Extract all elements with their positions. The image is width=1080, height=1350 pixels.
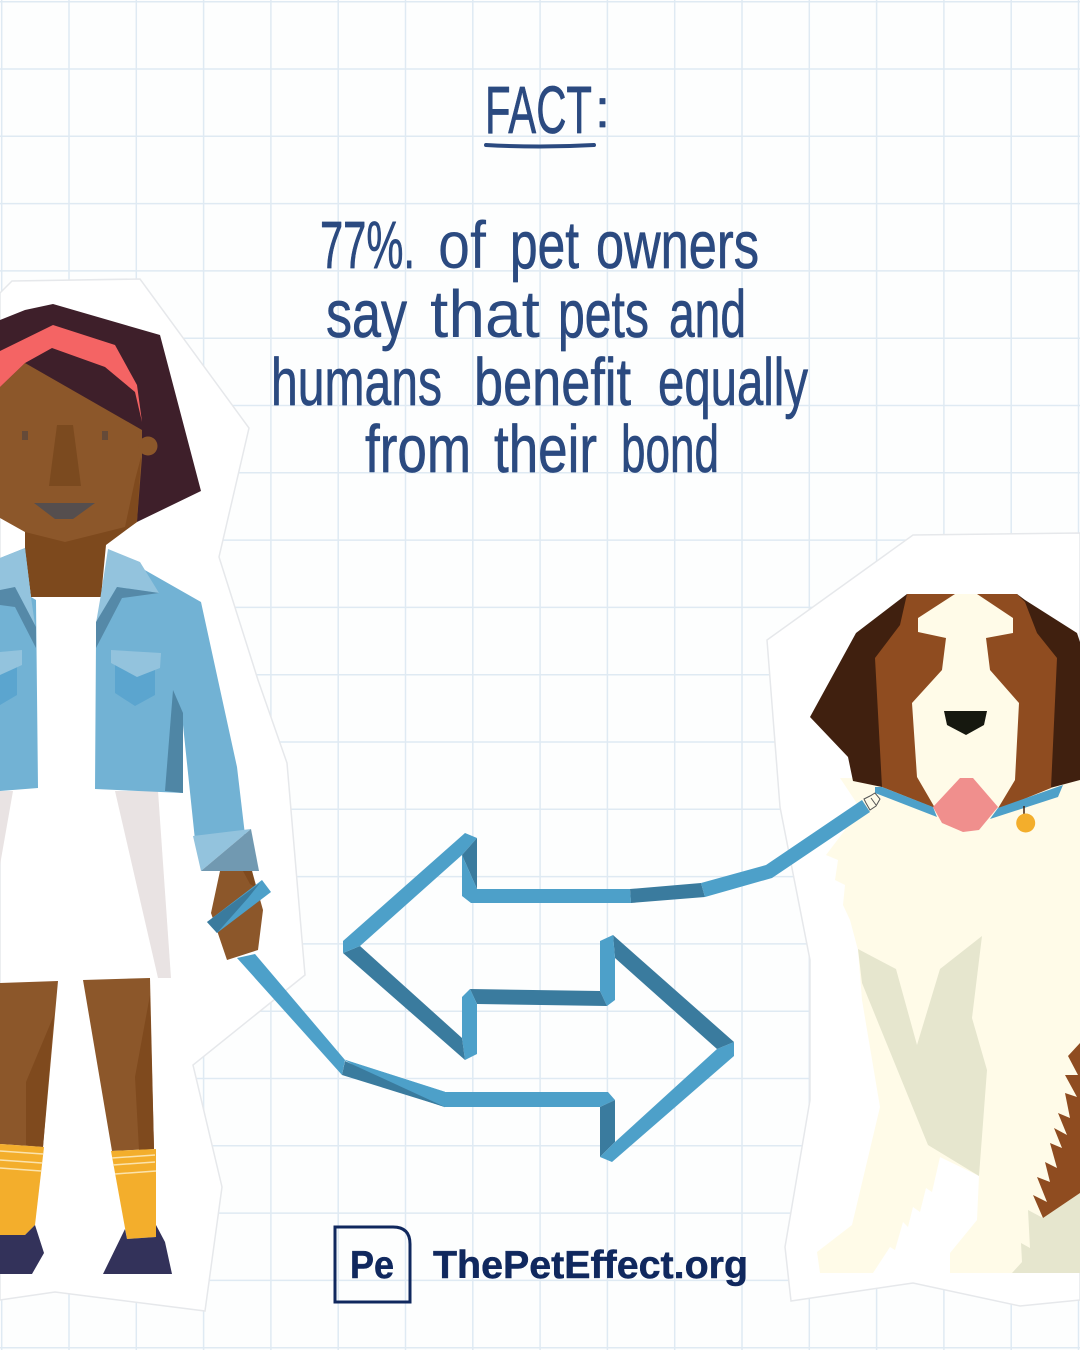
text block: 77% statistic: say — [326, 277, 407, 352]
face — [0, 363, 158, 542]
text block: 77% statistic: pet — [510, 208, 579, 283]
wristband — [207, 880, 271, 933]
text block: 77% statistic: humans — [271, 345, 442, 420]
legs — [0, 978, 154, 1151]
collar tag — [1016, 806, 1035, 832]
text block: 77% statistic: bond — [621, 412, 719, 487]
neck — [25, 515, 137, 597]
logo mark: Pe — [350, 1244, 394, 1287]
text block: 77% statistic: 77%. — [320, 208, 415, 283]
arrows: leash forming two-way arrows — [237, 793, 880, 1162]
gap between legs — [873, 1157, 979, 1273]
text block: 77% statistic: and — [669, 277, 746, 352]
panel: dog sticker cutout — [767, 533, 1080, 1306]
illustration: dog — [810, 594, 1080, 1273]
text block: 77% statistic: owners — [596, 208, 759, 283]
text block: 77% statistic: their — [494, 412, 597, 487]
brown flank — [1033, 1043, 1080, 1218]
heading: FACT: : — [595, 79, 610, 139]
dress shadow — [0, 791, 171, 978]
dark ears — [810, 594, 1080, 788]
text block: 77% statistic — [271, 208, 808, 487]
socks — [0, 1144, 156, 1239]
text block: 77% statistic: pets — [558, 277, 649, 352]
hand — [211, 871, 263, 960]
jacket — [0, 548, 259, 871]
tongue — [933, 778, 998, 832]
text block: 77% statistic: benefit — [474, 345, 631, 420]
text block: 77% statistic: equally — [658, 345, 808, 420]
nose — [944, 711, 987, 735]
text block: 77% statistic: from — [365, 412, 471, 487]
chest shading — [858, 936, 987, 1176]
heading: FACT: FACT — [485, 73, 592, 148]
body fur — [817, 778, 1080, 1273]
text block: 77% statistic: of — [438, 208, 486, 283]
panel: woman sticker cutout — [0, 279, 305, 1311]
website: ThePetEffect.org — [433, 1244, 748, 1287]
headband — [0, 325, 142, 422]
collar — [875, 785, 1063, 819]
hind leg shading — [1012, 1193, 1080, 1273]
brown head — [875, 594, 1057, 810]
text block: 77% statistic: that — [430, 277, 540, 352]
shoes — [0, 1225, 172, 1274]
hair — [0, 304, 201, 522]
face blaze — [912, 594, 1019, 810]
logo mark — [335, 1227, 410, 1302]
logo: The Pet Effect — [335, 1227, 748, 1302]
illustration: woman — [0, 304, 271, 1274]
